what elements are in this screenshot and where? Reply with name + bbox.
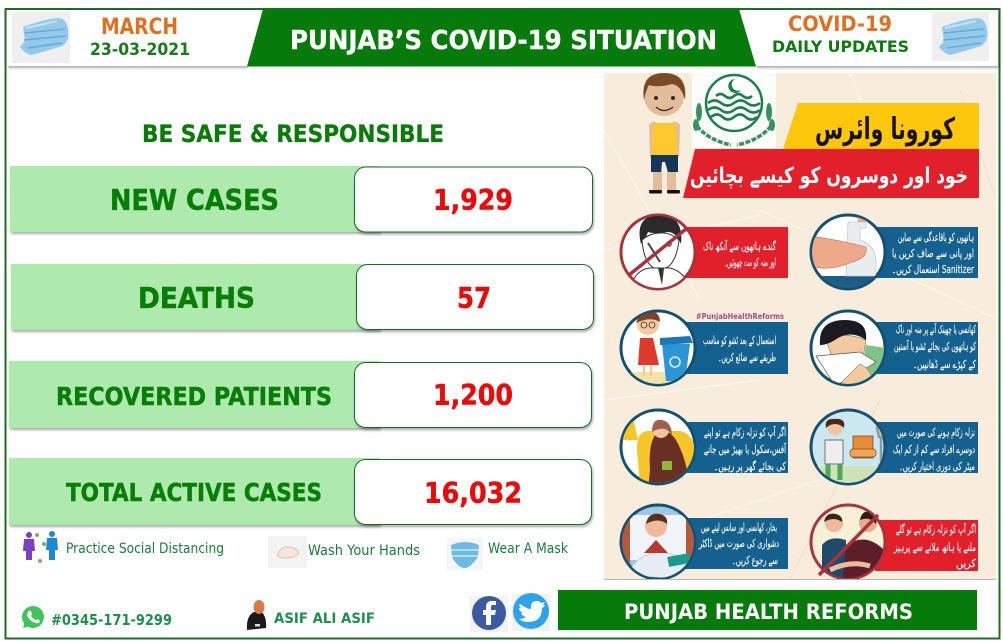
stat row: new cases: NEW CASES <box>110 184 279 217</box>
poster banner: corona virus <box>783 103 979 149</box>
stat row: new cases: 1,929 <box>433 184 513 217</box>
label: mask: Wear A Mask <box>488 541 569 557</box>
header: date panel <box>7 10 263 66</box>
tip: stay home: کی بجائے گھر پر رہیں۔ <box>714 460 787 473</box>
covid label: COVID-19 <box>788 12 892 36</box>
icon: facebook <box>470 596 508 632</box>
tip: do not touch face: گندے ہاتھوں سے آنکھ ناک <box>703 239 776 253</box>
tip: do not touch face: اور منہ کو مت چھوئیں۔ <box>724 256 776 269</box>
icon: whatsapp <box>22 606 44 628</box>
tip: wash hands: Sanitizer استعمال کریں۔ <box>892 263 974 276</box>
icon: face mask right <box>932 12 989 61</box>
tip: see doctor: سے رجوع کریں۔ <box>732 554 778 567</box>
tip: dispose tissue: استعمال کے بعد ٹشو کو مناسب <box>703 334 776 347</box>
stat row: recovered patients: RECOVERED PATIENTS <box>56 382 332 411</box>
icon: face mask left <box>12 12 70 63</box>
banner: punjab health reforms <box>558 590 977 630</box>
author name: ASIF ALI ASIF <box>274 611 375 627</box>
tip: keep distance <box>810 410 978 486</box>
stat row: recovered patients: 1,200 <box>433 379 513 412</box>
tip: avoid handshakes <box>811 505 978 585</box>
label: wash hands: Wash Your Hands <box>308 543 420 559</box>
stat row: total active cases: TOTAL ACTIVE CASES <box>66 478 322 507</box>
heading: be safe: BE SAFE & RESPONSIBLE <box>142 120 444 148</box>
tip: see doctor: بخار، کھانسی اور سانس لینے میں <box>701 521 777 534</box>
tip: dispose tissue: طریقے سے ضائع کریں۔ <box>718 351 776 364</box>
label: social distancing: Practice Social Distancing <box>66 541 224 557</box>
stat row: recovered patients <box>9 361 592 428</box>
hashtag: #PunjabHealthReforms <box>696 312 784 321</box>
phone number: #0345-171-9299 <box>51 611 172 629</box>
tip: stay home: آفس،سکول یا بھیڑ میں جانے <box>704 442 787 456</box>
icon: twitter <box>512 593 550 631</box>
date: 23-03-2021 <box>90 40 190 59</box>
title: PUNJAB’S COVID-19 SITUATION <box>290 26 717 56</box>
icon: social distancing <box>23 531 58 563</box>
tip: do not touch face <box>621 214 788 290</box>
stat row: deaths: 57 <box>457 282 491 315</box>
tip: stay home: اگر آپ کو نزلہ زکام ہے تو اپنے <box>704 425 786 439</box>
panel: urdu safety poster <box>604 73 1000 585</box>
tip: see doctor <box>620 505 788 580</box>
poster figure: boy <box>643 73 685 194</box>
stat row: deaths: DEATHS <box>138 282 255 315</box>
banner: punjab health reforms: PUNJAB HEALTH REFORMS <box>624 600 913 624</box>
header: update panel <box>739 10 998 66</box>
month: MARCH <box>101 15 178 40</box>
stat row: total active cases <box>9 458 592 525</box>
tip: avoid handshakes: کریں <box>956 557 977 570</box>
poster banner: protect yourself and others <box>683 149 979 198</box>
header: title banner <box>247 9 756 66</box>
stat row: deaths <box>11 264 594 330</box>
icon: mask <box>447 538 483 570</box>
tip: see doctor: دشواری کی صورت میں ڈاکٹر <box>698 537 779 550</box>
tip: dispose tissue <box>620 311 788 386</box>
icon: author <box>247 600 266 630</box>
tip: cover coughs <box>811 311 978 386</box>
tip: wash hands <box>810 215 978 290</box>
tip: stay home <box>621 410 788 490</box>
stat row: new cases <box>10 166 592 232</box>
daily updates label: DAILY UPDATES <box>772 37 909 56</box>
stat row: total active cases: 16,032 <box>424 477 522 510</box>
poster bottom rule <box>604 579 996 580</box>
poster logo: punjab emblem <box>692 73 776 148</box>
icon: wash hands <box>268 536 307 568</box>
